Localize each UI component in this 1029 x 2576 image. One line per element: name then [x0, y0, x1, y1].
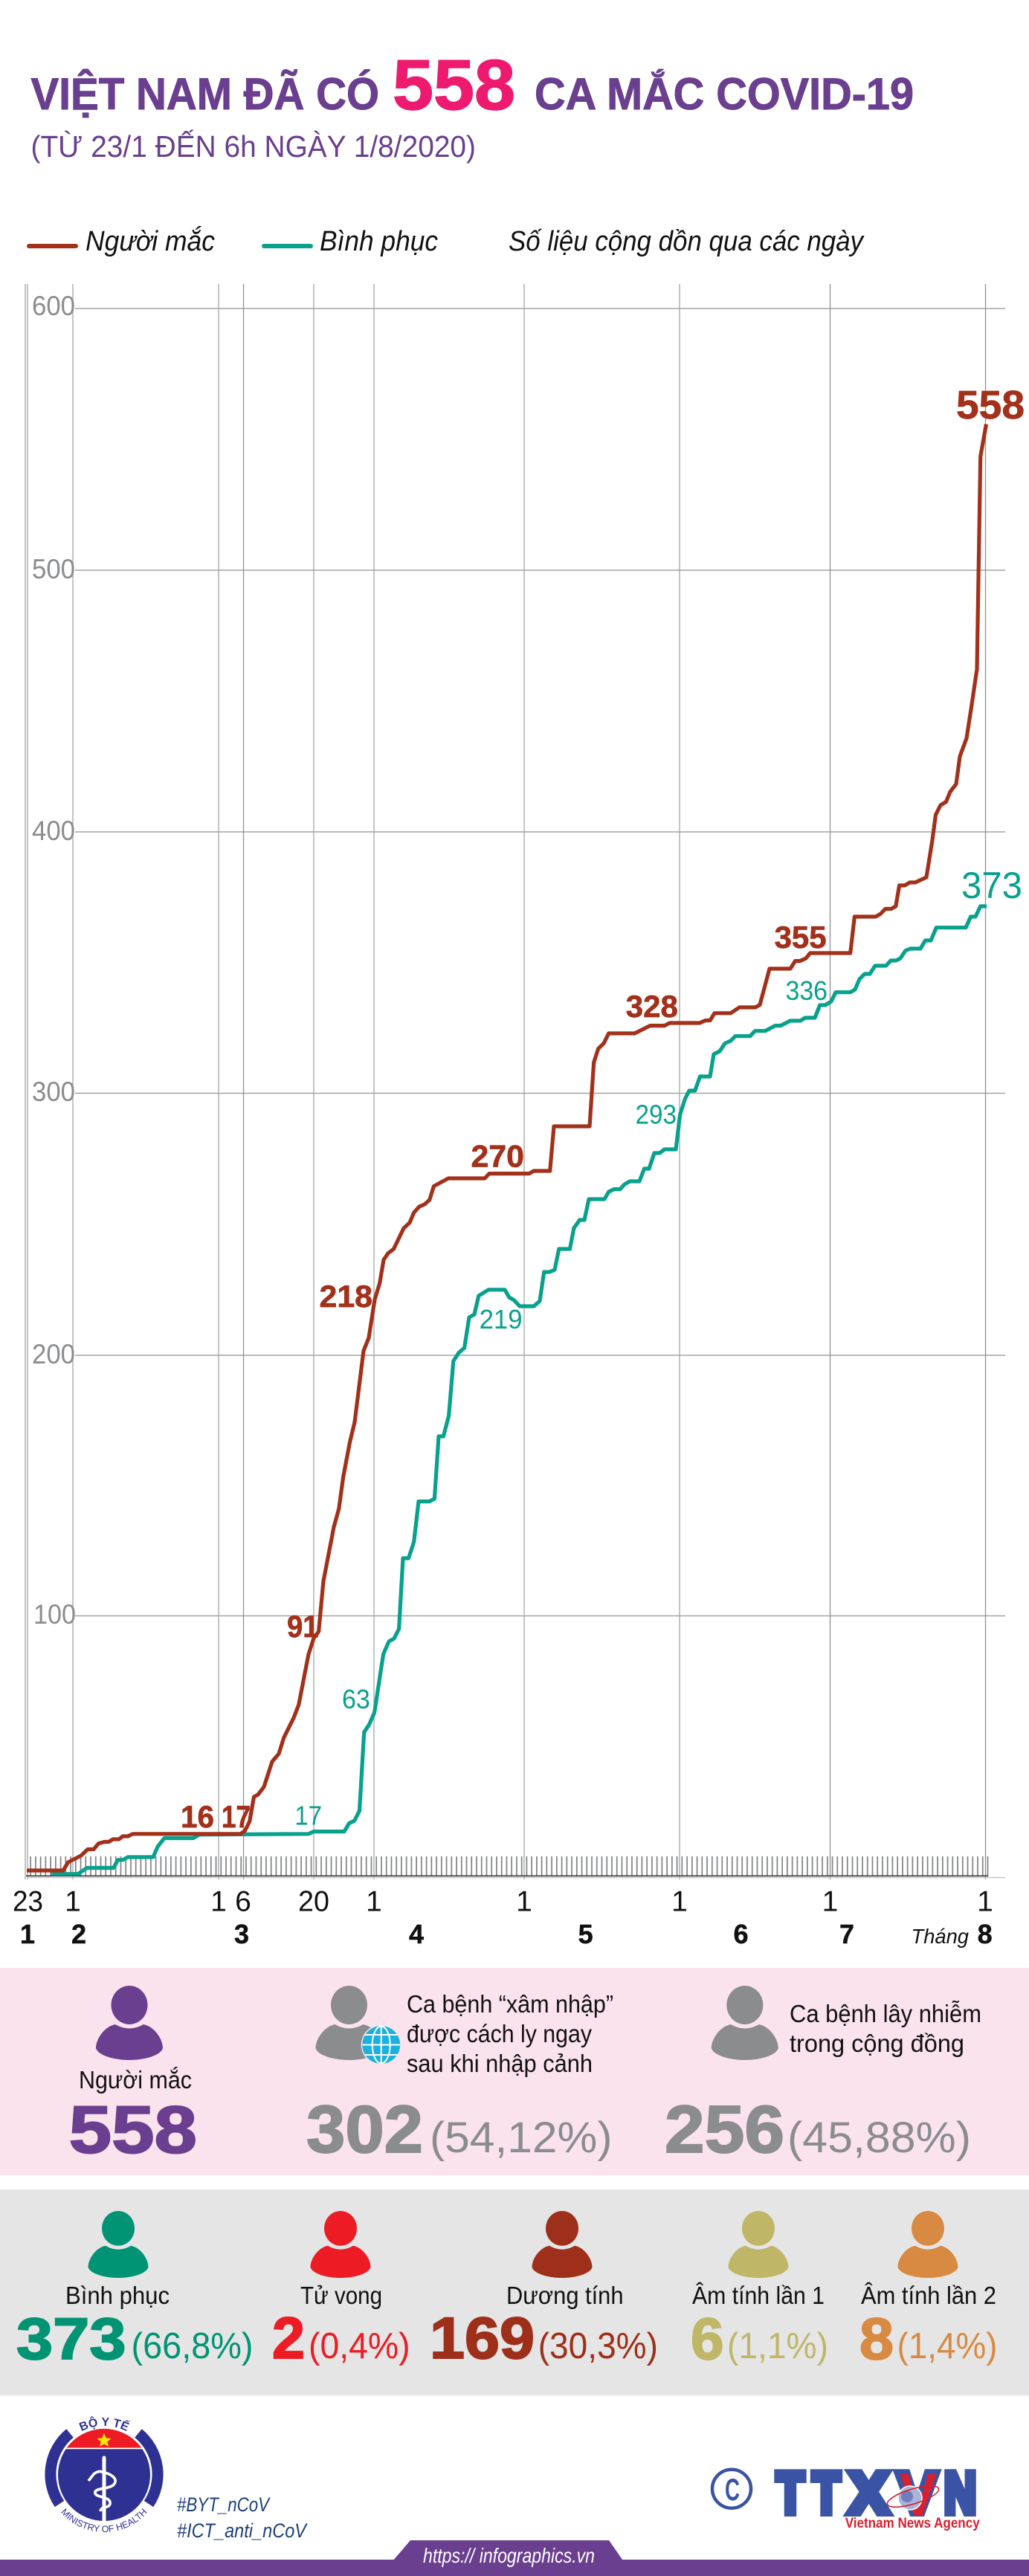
logo: TTXVN: T — [813, 2460, 840, 2525]
confirmed curve — [27, 424, 986, 1870]
stat: dương tính: Dương tính — [506, 2282, 623, 2309]
stat: âm tính lần 1: 6 — [691, 2305, 724, 2372]
x axis month labels: 4 — [409, 1919, 424, 1949]
text: imported cases: được cách ly ngay — [407, 2020, 592, 2047]
stat: âm tính lần 2: 8 — [859, 2305, 894, 2372]
title: CA MẮC COVID-19 — [535, 69, 914, 119]
title: 558 — [393, 45, 515, 125]
x axis month labels: 3 — [234, 1919, 249, 1949]
legend: người mắc: Người mắc — [86, 225, 215, 257]
hashtags: #BYT_nCoV — [177, 2493, 271, 2516]
number: 256: 256 — [665, 2093, 784, 2167]
hashtags — [177, 2493, 309, 2542]
recovered curve — [51, 906, 987, 1874]
logo: TTXVN: V — [897, 2460, 937, 2525]
y axis labels: 200 — [32, 1339, 75, 1369]
x axis month labels: 8 — [978, 1919, 993, 1949]
stat: dương tính: (30,3%) — [538, 2326, 658, 2366]
legend: bình phục: Bình phục — [320, 226, 438, 257]
stat: bình phục: Bình phục — [65, 2282, 170, 2309]
recovered value labels: 293 — [635, 1100, 677, 1130]
x axis baseline — [26, 1875, 988, 1876]
number: 256 — [665, 2093, 971, 2167]
text: imported cases: Ca bệnh “xâm nhập” — [407, 1990, 613, 2018]
x axis day labels: 1 — [366, 1886, 382, 1918]
text: community cases: Ca bệnh lây nhiễm — [790, 2000, 981, 2027]
number: 558: 558 — [69, 2094, 197, 2168]
legend — [29, 225, 865, 257]
y axis labels: 600 — [32, 291, 75, 321]
x axis day labels: 1 — [822, 1886, 838, 1918]
recovered value labels: 219 — [480, 1304, 523, 1334]
x axis day labels: 20 — [298, 1886, 329, 1918]
confirmed value labels: 16 — [181, 1799, 214, 1834]
recovered value labels: 63 — [342, 1684, 370, 1714]
x axis day labels: 1 — [977, 1886, 993, 1918]
number: 256: (45,88%) — [787, 2114, 971, 2162]
recovered value labels: 17 — [294, 1801, 322, 1831]
recovered value labels — [294, 865, 1022, 1831]
number: 302 — [306, 2093, 613, 2167]
logo: copyright symbol: C — [725, 2472, 740, 2507]
logo: TTXVN: V — [900, 2462, 937, 2529]
stat: dương tính: 169 — [430, 2305, 535, 2371]
confirmed value labels: 270 — [471, 1139, 524, 1174]
stat: tử vong: 2 — [272, 2305, 305, 2371]
day ticks — [30, 1856, 989, 1876]
stat: bình phục — [16, 2211, 253, 2372]
logo: ministry of health: MINISTRY OF HEALTH — [61, 2508, 147, 2532]
stat: bình phục: 373 — [16, 2305, 126, 2372]
stat: âm tính lần 1: Âm tính lần 1 — [692, 2282, 825, 2309]
confirmed value labels: 17 — [222, 1799, 251, 1834]
confirmed value labels: 91 — [287, 1609, 319, 1644]
x axis day labels: 1 — [65, 1886, 81, 1918]
panel: outcomes — [0, 2189, 1029, 2395]
y axis labels: 400 — [32, 816, 75, 846]
x axis day labels — [13, 1886, 993, 1918]
logo: TTXVN: T — [776, 2460, 804, 2525]
logo: TTXVN: N — [944, 2460, 976, 2525]
stat: âm tính lần 2 — [859, 2211, 998, 2372]
text: community cases — [790, 2000, 981, 2057]
chart grid — [25, 284, 1005, 1879]
panel: total cases — [0, 1968, 1029, 2175]
x axis month labels: 6 — [733, 1919, 749, 1949]
x axis month labels — [20, 1919, 993, 1949]
text: imported cases: sau khi nhập cảnh — [407, 2050, 593, 2077]
x axis month labels: 2 — [71, 1919, 86, 1949]
logo: copyright symbol — [712, 2470, 751, 2508]
x axis day labels: 1 — [671, 1886, 688, 1918]
hashtags: #ICT_anti_nCoV — [177, 2519, 309, 2542]
stat: tử vong — [272, 2211, 410, 2371]
x axis day labels: 23 — [13, 1886, 43, 1918]
x axis month labels: 5 — [578, 1919, 593, 1949]
logo: ministry of health: BỘ Y TẾ — [79, 2416, 131, 2431]
number: 302: 302 — [306, 2093, 423, 2167]
stat: bình phục: (66,8%) — [131, 2326, 253, 2366]
y axis labels — [32, 291, 76, 1630]
month axis title: Tháng — [912, 1925, 969, 1948]
subtitle: (TỪ 23/1 ĐẾN 6h NGÀY 1/8/2020) — [31, 129, 476, 164]
footer bar: https:// infographics.vn — [423, 2544, 595, 2567]
stat: âm tính lần 2: Âm tính lần 2 — [861, 2282, 996, 2309]
confirmed value labels: 355 — [775, 920, 827, 955]
title — [31, 45, 914, 125]
logo: ministry of health — [45, 2416, 164, 2532]
confirmed value labels: 328 — [626, 989, 678, 1024]
stat: âm tính lần 1: (1,1%) — [727, 2326, 828, 2366]
stat: tử vong: Tử vong — [300, 2282, 382, 2309]
y axis labels: 500 — [32, 554, 75, 584]
x axis day labels: 1 — [516, 1886, 532, 1918]
confirmed value labels — [181, 383, 1025, 1834]
recovered value labels: 373 — [961, 865, 1022, 906]
logo: TTXVN: X — [849, 2460, 888, 2525]
title: VIỆT NAM ĐÃ CÓ — [31, 69, 379, 119]
stat: dương tính — [430, 2211, 658, 2371]
text: imported cases — [407, 1990, 613, 2077]
x axis day labels: 1 — [210, 1886, 227, 1918]
y axis labels: 100 — [33, 1599, 76, 1630]
legend note: Số liệu cộng dồn qua các ngày — [509, 226, 865, 257]
icon: person gray with globe — [315, 1986, 401, 2065]
icon: person gray — [712, 1986, 778, 2060]
stat: âm tính lần 2: (1,4%) — [897, 2326, 998, 2366]
recovered value labels: 336 — [785, 975, 828, 1006]
text: community cases: trong cộng đồng — [790, 2030, 964, 2057]
footer bar — [0, 2540, 1029, 2576]
x axis month labels: 7 — [839, 1919, 854, 1949]
stat: tử vong: (0,4%) — [309, 2326, 410, 2366]
number: 302: (54,12%) — [430, 2114, 613, 2162]
line chart — [13, 284, 1025, 1949]
logo: TTXVN — [776, 2460, 980, 2531]
confirmed value labels: 558 — [956, 383, 1025, 427]
y axis labels: 300 — [32, 1076, 75, 1107]
icon: person purple — [96, 1986, 163, 2060]
stat: âm tính lần 1 — [691, 2211, 828, 2372]
x axis day labels: 6 — [235, 1886, 251, 1918]
logo: TTXVN: Vietnam News Agency — [845, 2516, 980, 2531]
x axis month labels: 1 — [20, 1919, 35, 1949]
label: người mắc: Người mắc — [79, 2066, 192, 2094]
confirmed value labels: 218 — [320, 1279, 372, 1314]
